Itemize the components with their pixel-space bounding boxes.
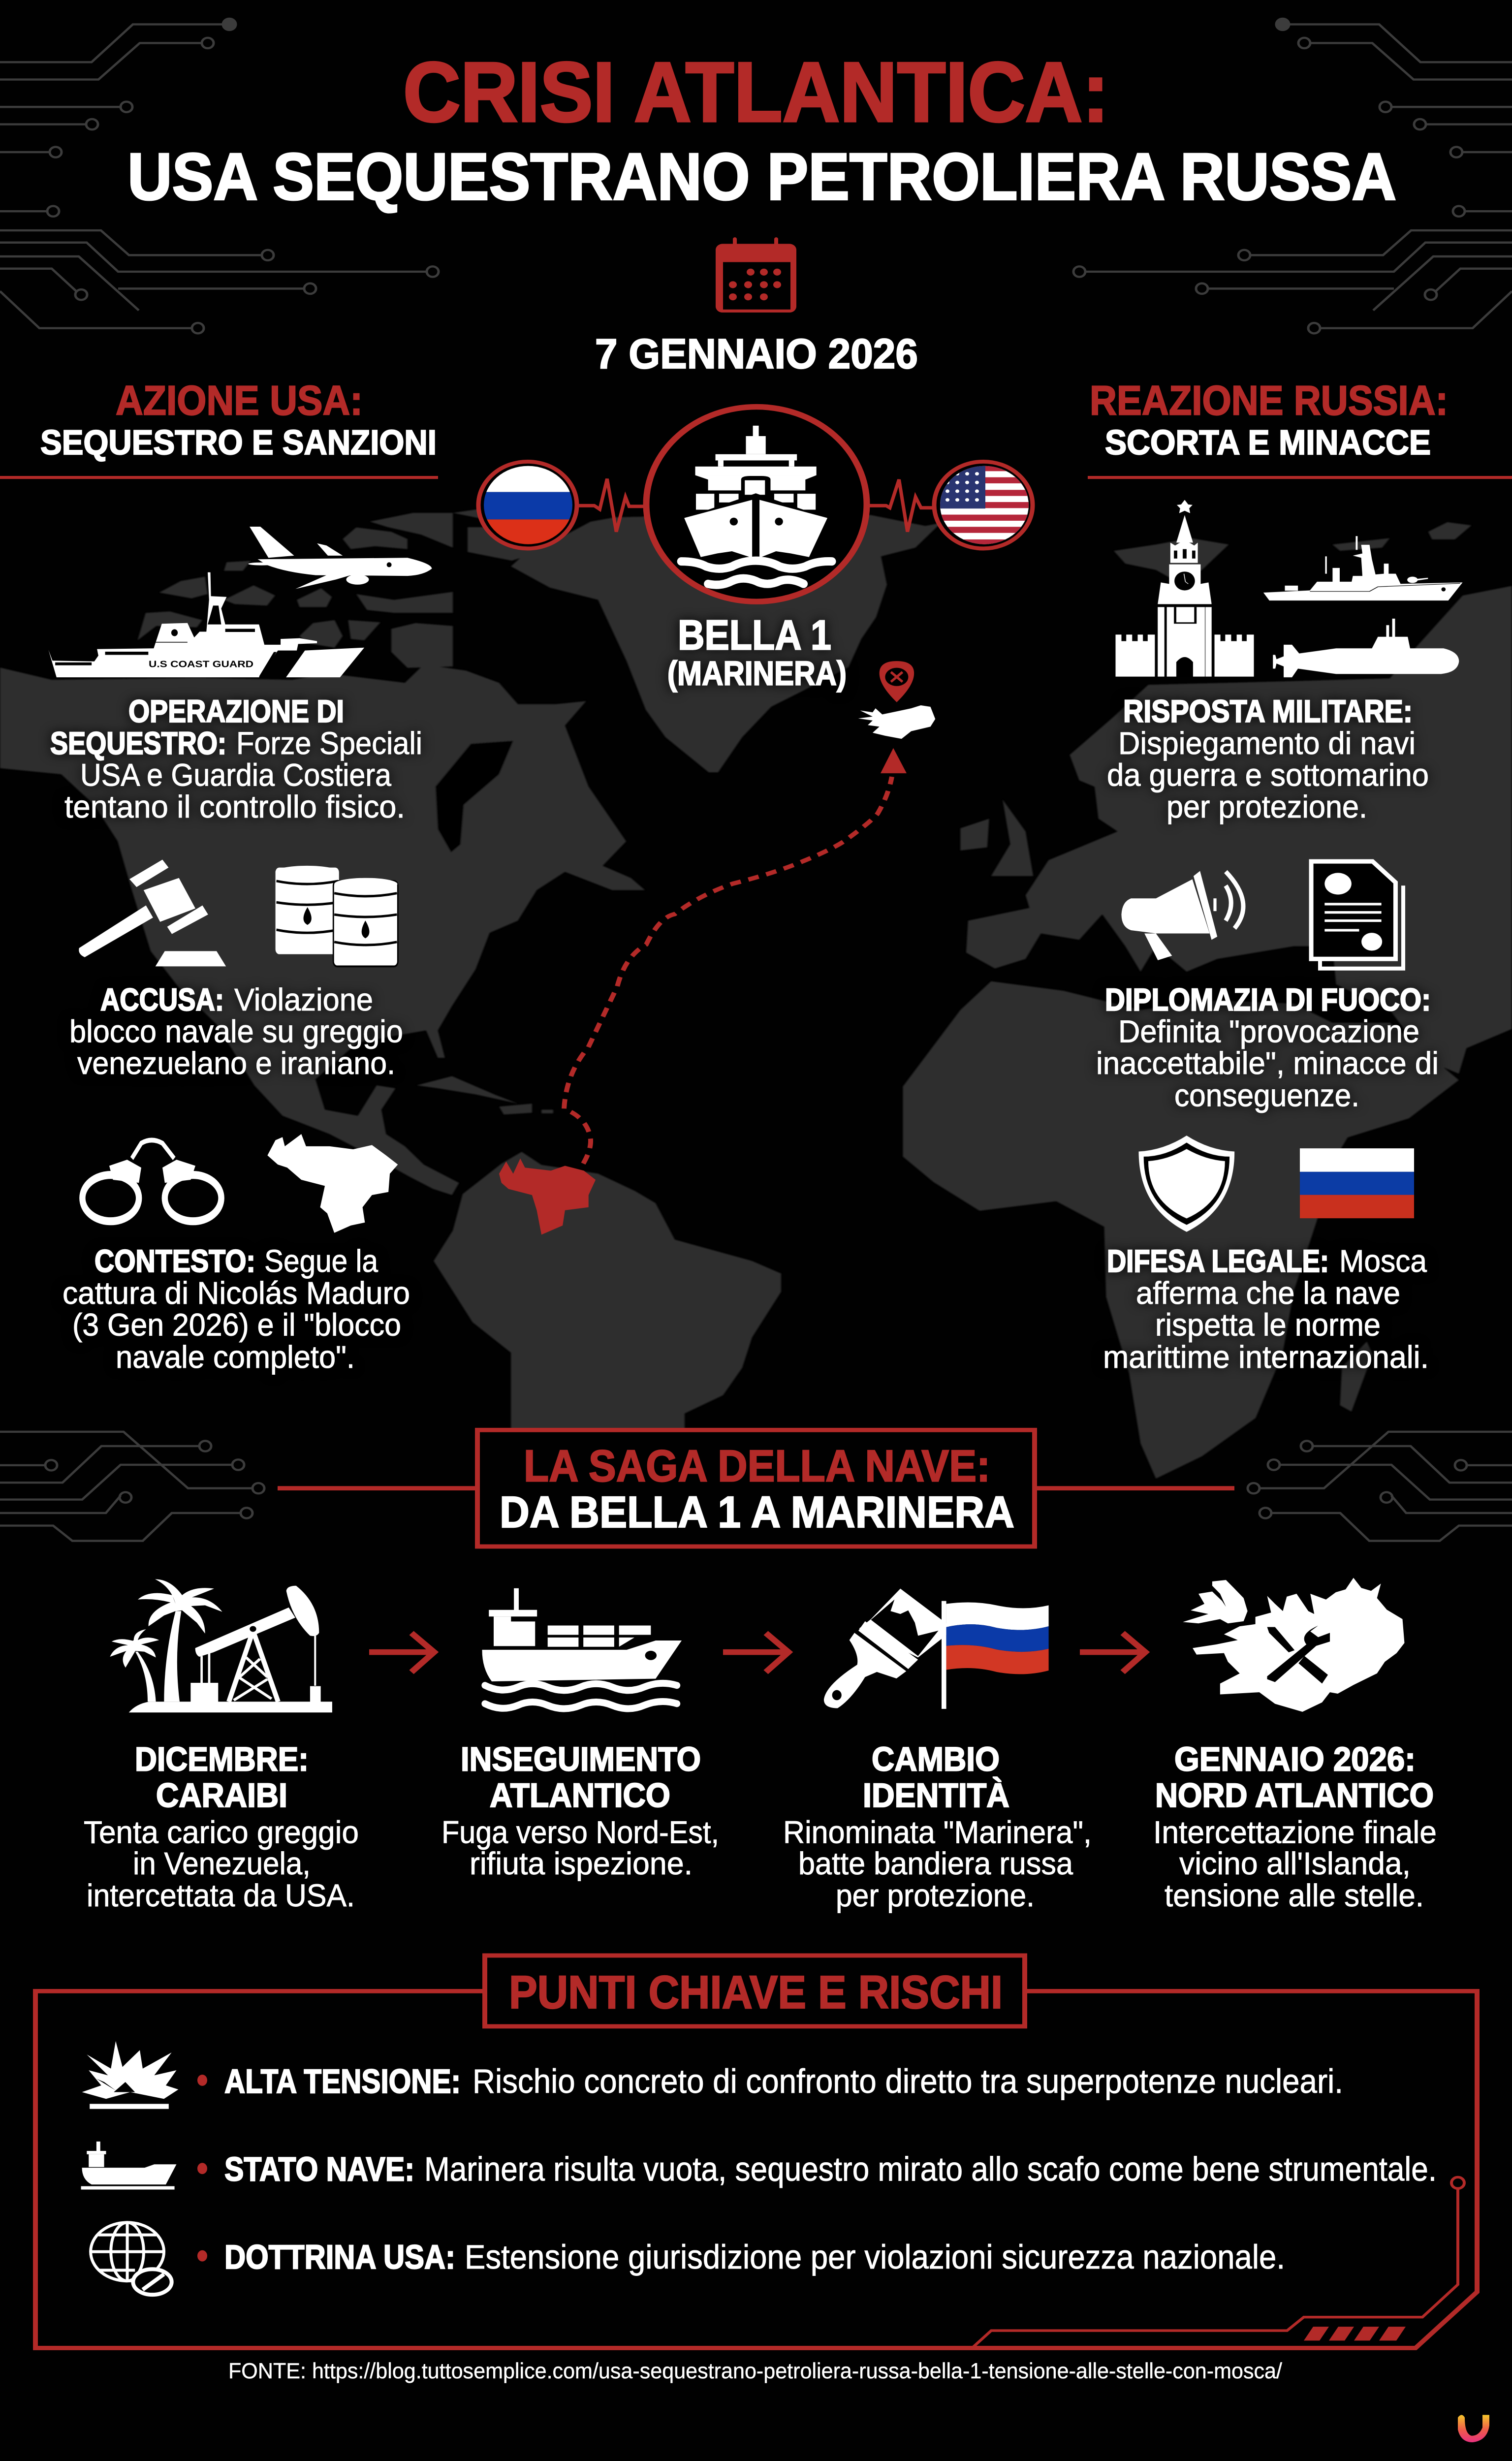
step 1 text: in Venezuela, xyxy=(133,1847,311,1881)
central emblem xyxy=(478,407,1033,693)
step 1 text xyxy=(84,1740,359,1913)
step 2 text xyxy=(441,1740,719,1881)
text: accusa: blocco navale su greggio xyxy=(69,1014,403,1049)
icon: calendar xyxy=(716,237,796,313)
step 4 text: GENNAIO 2026: xyxy=(1174,1740,1416,1778)
stripes xyxy=(1304,2327,1406,2340)
venezuela highlight xyxy=(499,1159,596,1234)
panel: azione usa xyxy=(48,527,432,1375)
text: contesto xyxy=(63,1244,410,1375)
text: accusa: ACCUSA: xyxy=(100,983,224,1017)
step 1 text: intercettata da USA. xyxy=(87,1879,355,1913)
icon: document xyxy=(1311,861,1403,969)
icon: warship xyxy=(1263,536,1463,600)
step 4 text: NORD ATLANTICO xyxy=(1155,1776,1434,1814)
text: contesto: CONTESTO: xyxy=(94,1244,255,1279)
icon: kremlin tower xyxy=(1115,500,1254,677)
text: difesa: Mosca xyxy=(1339,1244,1427,1279)
icon: palms and pumpjack xyxy=(110,1579,332,1712)
icon: megaphone xyxy=(1121,871,1243,960)
step 2 text: rifiuta ispezione. xyxy=(470,1847,693,1881)
icon: iceland with tools xyxy=(1183,1578,1404,1712)
decorative circuits xyxy=(0,19,439,333)
icon: coast guard cutter xyxy=(48,572,364,677)
text: risposta: RISPOSTA MILITARE: xyxy=(1123,694,1413,729)
heading: PUNTI CHIAVE E RISCHI xyxy=(509,1967,1003,2018)
text: contesto: (3 Gen 2026) e il "blocco xyxy=(72,1308,401,1343)
route arrow xyxy=(564,748,907,1164)
heading: la saga: DA BELLA 1 A MARINERA xyxy=(500,1488,1014,1537)
heading: la saga xyxy=(278,1430,1234,1546)
icon: container ship xyxy=(482,1588,682,1708)
icon: shield xyxy=(1139,1136,1234,1232)
icon: ship small xyxy=(81,2142,176,2189)
text: diplomazia: conseguenze. xyxy=(1174,1078,1359,1113)
text: contesto: Segue la xyxy=(264,1244,378,1279)
icon: submarine xyxy=(1273,619,1459,677)
icon: paintbrush and flag xyxy=(824,1589,1049,1709)
icon: coast guard cutter: U.S COAST GUARD xyxy=(149,660,253,669)
arrow xyxy=(369,1633,434,1672)
step 1 text: Tenta carico greggio xyxy=(84,1815,359,1850)
icon: handcuffs xyxy=(82,1140,221,1221)
panel: reazione russia xyxy=(1096,500,1463,1375)
text: operazione: tentano il controllo fisico. xyxy=(64,790,405,824)
heading: azione usa: AZIONE USA: xyxy=(116,378,363,424)
logo xyxy=(1458,2415,1489,2442)
text: contesto: navale completo". xyxy=(116,1340,355,1375)
step 2 text: INSEGUIMENTO xyxy=(461,1740,701,1778)
step 4 text: vicino all'Islanda, xyxy=(1179,1847,1411,1881)
source: FONTE: https://blog.tuttosemplice.com/usa-sequestrano-petroliera-russa-bella-1-tensione-alle-stelle-con-mosca/ xyxy=(228,2359,1283,2383)
timeline xyxy=(84,1578,1437,1913)
text: accusa: venezuelano e iraniano. xyxy=(77,1046,395,1081)
text: contesto: cattura di Nicolás Maduro xyxy=(63,1276,410,1311)
text: diplomazia: DIPLOMAZIA DI FUOCO: xyxy=(1105,983,1431,1017)
step 3 text: Rinominata "Marinera", xyxy=(783,1815,1092,1850)
icon: aircraft xyxy=(248,527,432,589)
heading: reazione russia: SCORTA E MINACCE xyxy=(1105,423,1431,462)
item: alta tensione: Rischio concreto di confronto diretto tra superpotenze nucleari. xyxy=(472,2062,1343,2100)
step 3 text: CAMBIO xyxy=(872,1740,1000,1778)
step 3 text xyxy=(783,1740,1092,1913)
heading: azione usa xyxy=(0,378,438,479)
iceland and pin xyxy=(858,661,935,739)
text: difesa xyxy=(1103,1244,1429,1375)
text: diplomazia: inaccettabile", minacce di xyxy=(1096,1046,1439,1081)
step 3 text: batte bandiera russa xyxy=(798,1847,1073,1881)
icon: globe ban xyxy=(91,2222,172,2295)
ship name xyxy=(667,612,847,693)
item: stato nave: STATO NAVE: xyxy=(224,2150,414,2188)
text: accusa xyxy=(69,983,403,1081)
text: diplomazia: Definita "provocazione xyxy=(1118,1014,1419,1049)
step 4 text: tensione alle stelle. xyxy=(1165,1879,1424,1913)
step 3 text: per protezione. xyxy=(836,1879,1035,1913)
russia flag badge xyxy=(478,462,577,548)
arrow xyxy=(1080,1633,1145,1672)
text: difesa: rispetta le norme xyxy=(1155,1308,1381,1343)
text: difesa: marittime internazionali. xyxy=(1103,1340,1429,1375)
step 1 text: CARAIBI xyxy=(156,1776,287,1814)
heading: azione usa: SEQUESTRO E SANZIONI xyxy=(40,423,437,462)
heartbeat lines xyxy=(579,479,934,532)
text: operazione xyxy=(50,694,422,824)
text: operazione: SEQUESTRO: xyxy=(50,726,226,761)
panel: punti chiave xyxy=(35,1956,1477,2348)
ship name: (MARINERA) xyxy=(667,654,847,693)
title: CRISI ATLANTICA: xyxy=(403,44,1109,139)
heading box xyxy=(485,1956,1025,2026)
title xyxy=(127,44,1396,214)
item: alta tensione xyxy=(197,2062,1343,2100)
text: difesa: afferma che la nave xyxy=(1136,1276,1400,1311)
text: risposta xyxy=(1107,694,1429,824)
icon: gavel xyxy=(79,860,226,966)
icon: explosion xyxy=(82,2041,178,2109)
step 2 text: ATLANTICO xyxy=(490,1776,670,1814)
step 1 text: DICEMBRE: xyxy=(135,1740,309,1778)
text: risposta: Dispiegamento di navi xyxy=(1118,726,1416,761)
icon: oil barrels xyxy=(276,866,398,966)
arrow xyxy=(723,1633,788,1672)
step 3 text: IDENTITÀ xyxy=(863,1776,1009,1814)
step 4 text: Intercettazione finale xyxy=(1153,1815,1437,1850)
text: risposta: per protezione. xyxy=(1166,790,1367,824)
frame xyxy=(35,1991,1477,2348)
item: dottrina usa: Estensione giurisdizione per violazioni sicurezza nazionale. xyxy=(465,2238,1285,2276)
icon: venezuela silhouette xyxy=(267,1134,398,1233)
ship badge xyxy=(646,407,867,601)
text: risposta: da guerra e sottomarino xyxy=(1107,758,1429,793)
icon: russia flag xyxy=(1300,1148,1414,1218)
ship name: BELLA 1 xyxy=(678,612,831,659)
text: accusa: Violazione xyxy=(234,983,373,1017)
text: difesa: DIFESA LEGALE: xyxy=(1107,1244,1329,1279)
item: dottrina usa: DOTTRINA USA: xyxy=(224,2238,455,2276)
text: operazione: Forze Speciali xyxy=(236,726,422,761)
step 4 text xyxy=(1153,1740,1437,1913)
world map xyxy=(0,504,1512,1479)
step 2 text: Fuga verso Nord-Est, xyxy=(441,1815,719,1850)
icon: tanker front xyxy=(681,426,832,585)
text: operazione: OPERAZIONE DI xyxy=(128,694,344,729)
item: alta tensione: ALTA TENSIONE: xyxy=(224,2062,461,2100)
text: diplomazia xyxy=(1096,983,1439,1113)
heading: la saga: LA SAGA DELLA NAVE: xyxy=(524,1441,990,1491)
heading: reazione russia xyxy=(1088,378,1512,479)
text: operazione: USA e Guardia Costiera xyxy=(80,758,391,793)
item: dottrina usa xyxy=(197,2238,1285,2276)
usa flag badge xyxy=(934,462,1033,548)
date: 7 GENNAIO 2026 xyxy=(595,330,918,378)
